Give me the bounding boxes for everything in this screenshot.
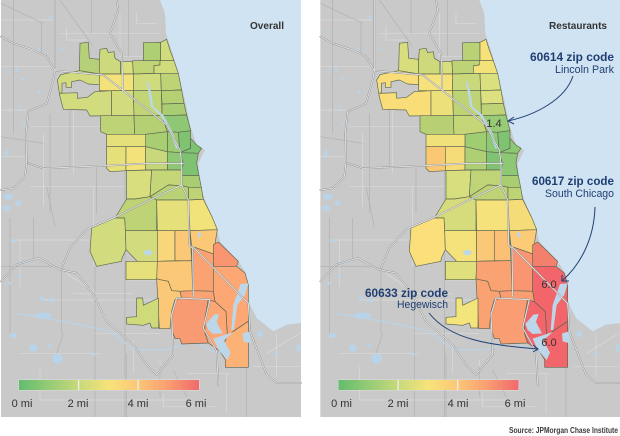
legend: distance colour scale: 4 mi <box>128 398 148 410</box>
callout: 60617 South Chicago: 60617 zip code <box>532 174 614 188</box>
legend: distance colour scale <box>12 380 206 410</box>
legend: distance colour scale: 6 mi <box>505 398 525 410</box>
base map with lake and roads <box>320 0 620 417</box>
legend: distance colour scale: 0 mi <box>12 398 32 410</box>
highways and waterways <box>1 0 301 385</box>
callout: 60617 South Chicago: South Chicago <box>545 188 614 200</box>
callout: 60614 Lincoln Park: Lincoln Park <box>555 64 614 76</box>
arrow: to 60617 <box>562 207 595 281</box>
callout: 60614 Lincoln Park: 60614 zip code <box>530 50 614 64</box>
callout: 60633 Hegewisch: Hegewisch <box>397 299 448 311</box>
heading: overall: Overall <box>250 20 284 32</box>
legend: distance colour scale: 2 mi <box>388 398 408 410</box>
callout: 60614 Lincoln Park <box>530 50 614 76</box>
callout: 60633 Hegewisch <box>365 286 448 311</box>
restaurants zip code choropleth <box>377 39 568 367</box>
arrow: to 60633 <box>429 313 538 352</box>
heading: restaurants: Restaurants <box>549 20 607 32</box>
base map with lake and roads <box>1 0 301 417</box>
callout: 60617 South Chicago <box>532 174 614 200</box>
highways and waterways <box>320 0 620 385</box>
panel: restaurants map <box>320 0 620 417</box>
callout: 60633 Hegewisch: 60633 zip code <box>365 286 448 300</box>
legend: distance colour scale <box>331 380 525 410</box>
value: 6.0 South Chicago: 6.0 <box>541 279 557 291</box>
value: 1.4: 1.4 <box>486 118 502 130</box>
value: 6.0 Hegewisch: 6.0 <box>541 337 557 349</box>
panel: overall map <box>1 0 301 417</box>
overall zip code choropleth <box>57 39 248 367</box>
legend: distance colour scale: 4 mi <box>448 398 468 410</box>
legend: distance colour scale: 2 mi <box>68 398 88 410</box>
legend: distance colour scale: 0 mi <box>331 398 352 410</box>
arrow: to 60614 <box>508 76 573 124</box>
legend: distance colour scale: 6 mi <box>186 398 206 410</box>
